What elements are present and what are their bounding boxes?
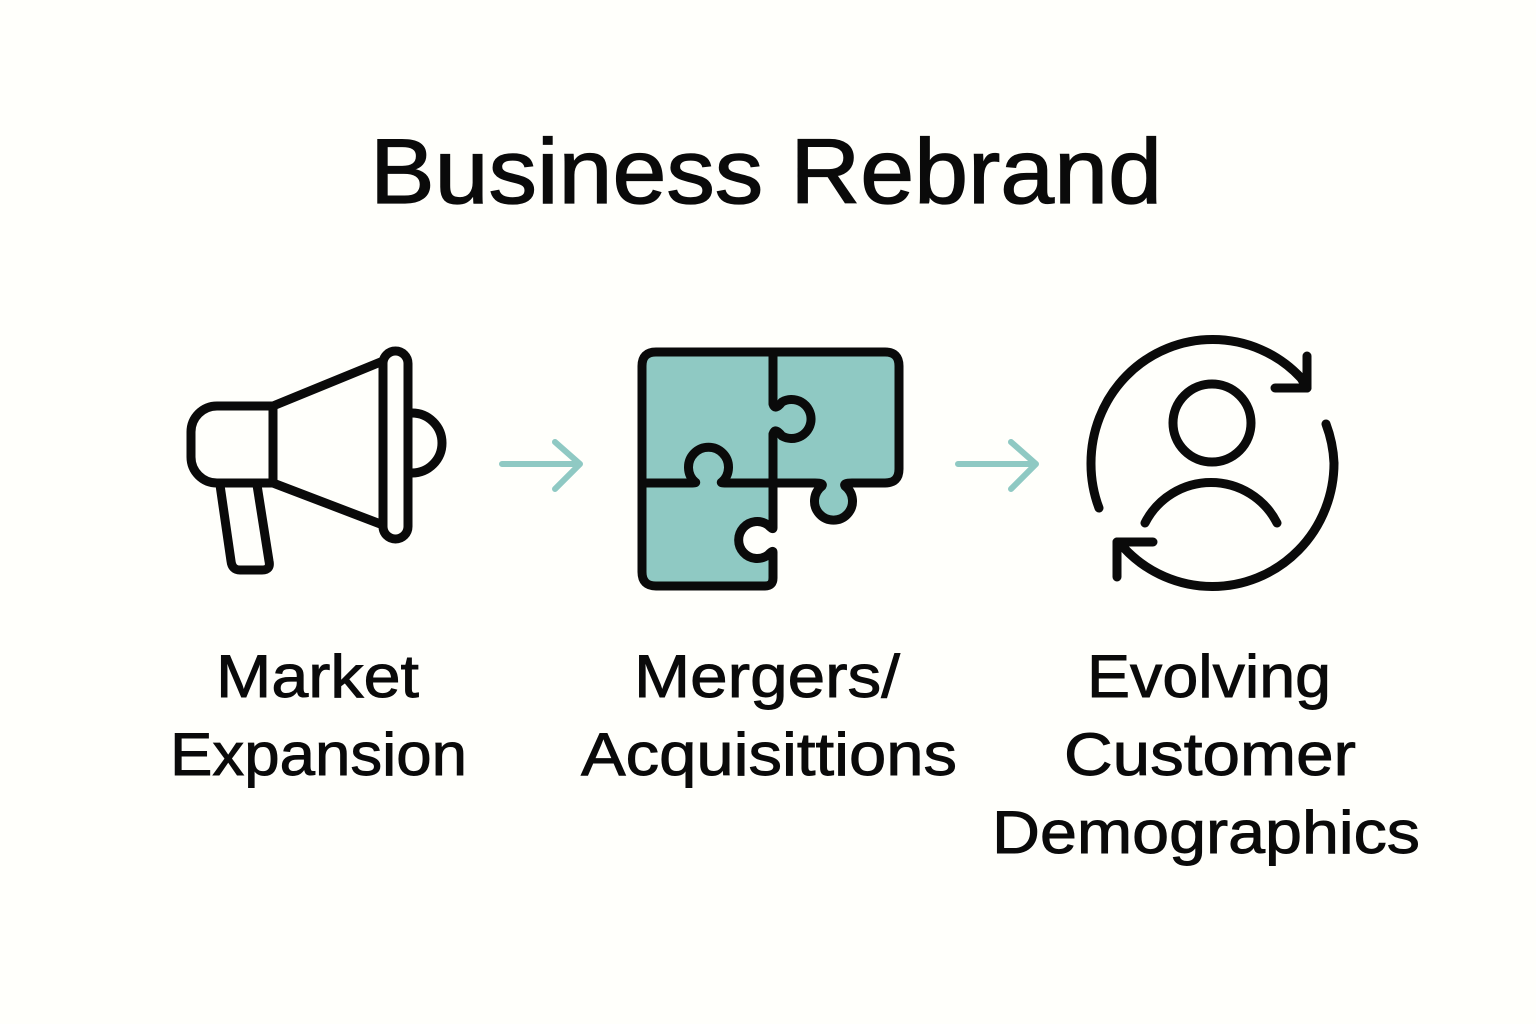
label: market expansion: Market: [216, 643, 419, 710]
label: mergers / acquisitions: [581, 643, 957, 788]
icon: puzzle pieces: [642, 352, 899, 586]
label: evolving customer demographics: Customer: [1064, 721, 1356, 788]
icon: customer with rotating arrows: [1091, 339, 1334, 587]
label: evolving customer demographics: Demographics: [992, 799, 1420, 866]
arrow: puzzle to customer: [958, 442, 1036, 489]
label: market expansion: [170, 643, 467, 788]
arrow: megaphone to puzzle: [502, 442, 580, 489]
label: mergers / acquisitions: Acquisittions: [581, 721, 957, 788]
title: Business Rebrand: [370, 121, 1162, 223]
label: mergers / acquisitions: Mergers/: [634, 643, 900, 710]
label: evolving customer demographics: [992, 643, 1420, 866]
label: evolving customer demographics: Evolving: [1087, 643, 1331, 710]
icon: megaphone: [191, 351, 442, 570]
label: market expansion: Expansion: [170, 721, 467, 788]
